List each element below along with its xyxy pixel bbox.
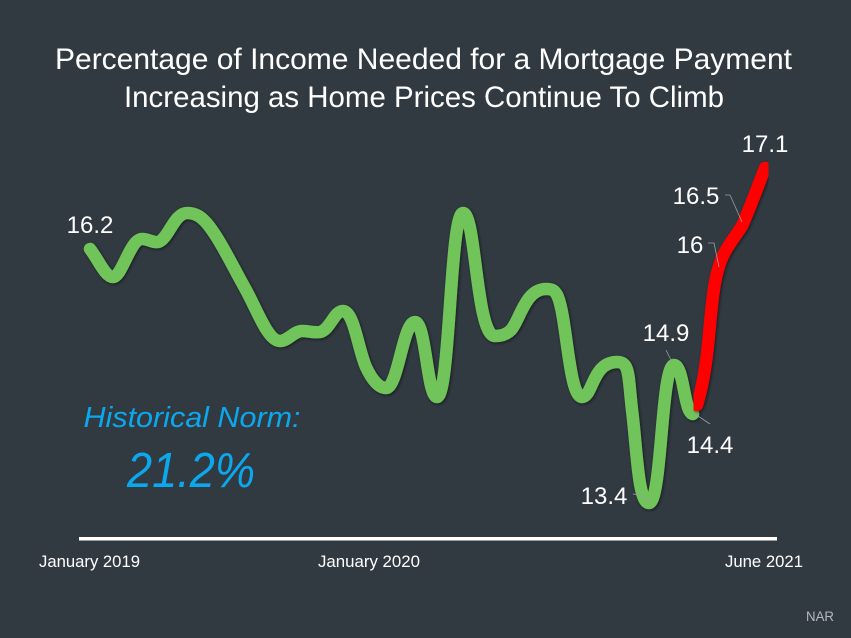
data labels: 14.9: [643, 320, 689, 347]
source label: NAR: [806, 608, 834, 624]
data labels: [67, 131, 788, 510]
data labels: 16.2: [67, 212, 113, 239]
x axis labels: June 2021: [725, 552, 803, 571]
callout: historical norm: Historical Norm:: [84, 402, 300, 434]
x axis labels: January 2020: [318, 552, 420, 571]
x axis: [79, 537, 777, 540]
title: Increasing as Home Prices Continue To Climb: [124, 81, 724, 114]
x axis labels: [39, 552, 803, 571]
data labels: 17.1: [742, 131, 788, 158]
callout: historical norm: 21.2%: [126, 444, 255, 498]
data labels: 16: [677, 232, 703, 259]
data labels: 13.4: [581, 483, 627, 510]
green line: income percentage trend: [90, 213, 693, 503]
x axis labels: January 2019: [39, 552, 140, 571]
title: Percentage of Income Needed for a Mortgage Payment: [55, 43, 793, 76]
data labels: 16.5: [673, 183, 719, 210]
title: [55, 43, 793, 114]
leader lines: [633, 195, 742, 502]
data labels: 14.4: [687, 432, 733, 459]
red line: recent climb: [697, 168, 765, 405]
callout: historical norm: [84, 402, 300, 498]
